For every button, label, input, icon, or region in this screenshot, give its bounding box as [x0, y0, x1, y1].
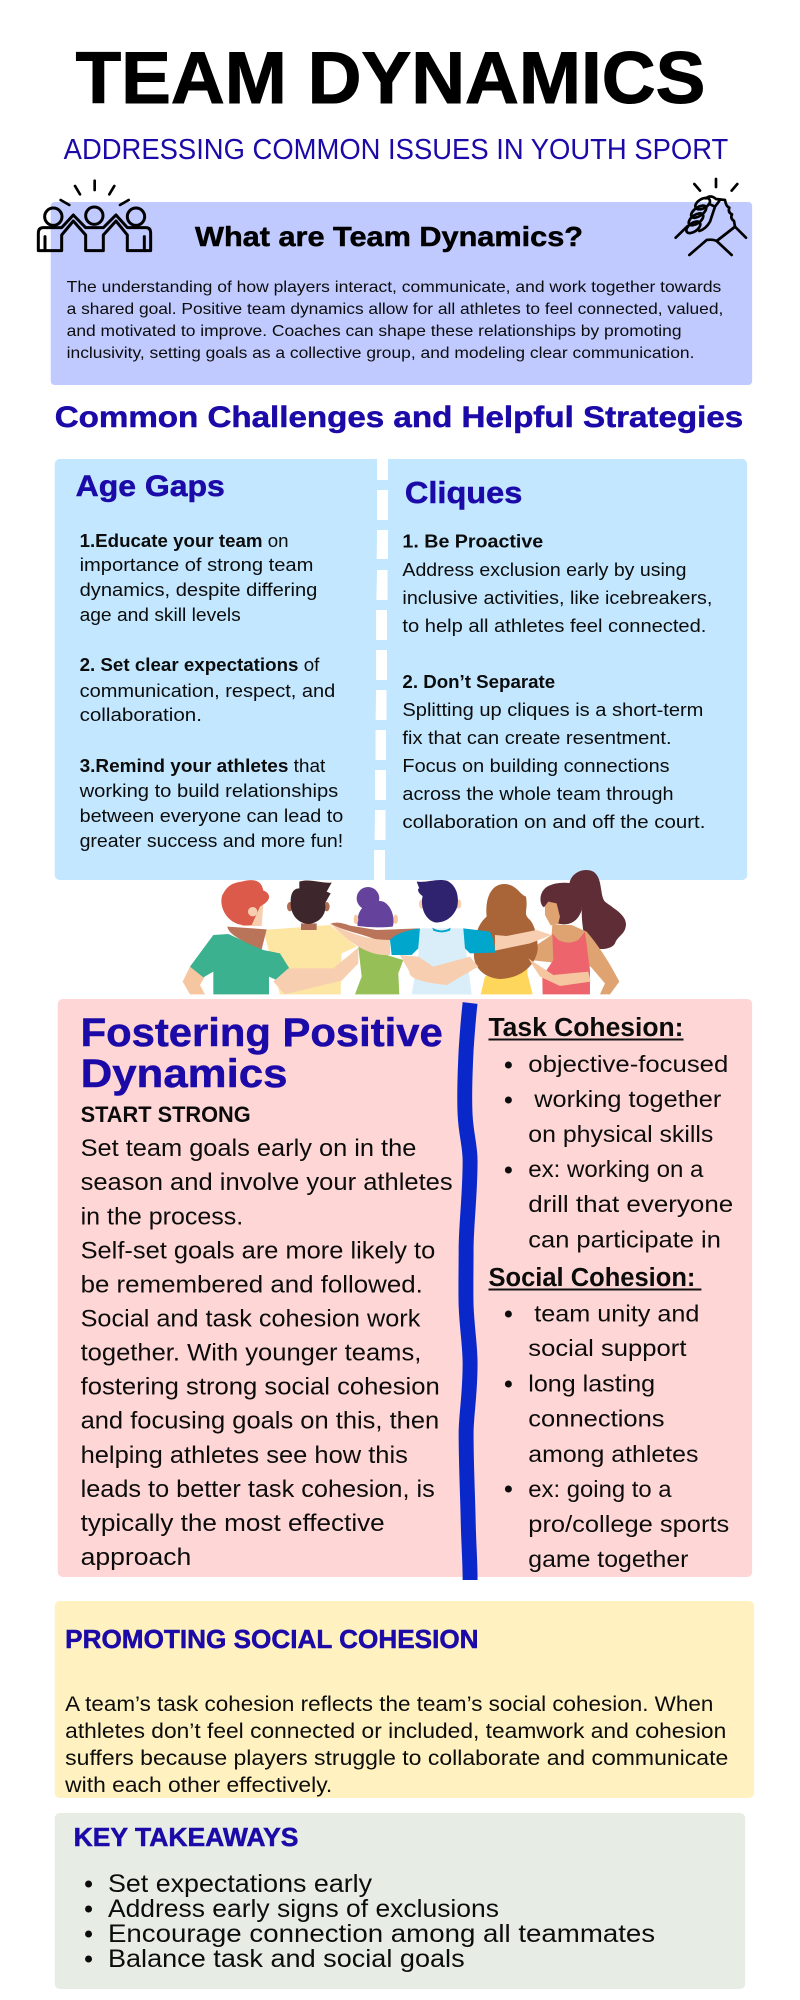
ponytail	[569, 870, 626, 949]
fostering text: together. With younger teams,	[81, 1339, 421, 1367]
social cohesion list: social support	[528, 1335, 687, 1361]
man with dark hair	[263, 881, 357, 994]
panel text: inclusivity, setting goals as a collective group, and modeling clear communication.	[67, 345, 694, 362]
cliques list: 2. Don’t Separate	[402, 671, 555, 692]
wavy divider	[465, 1003, 470, 1580]
promoting text: with each other effectively.	[64, 1774, 332, 1797]
promoting text: A team’s task cohesion reflects the team’s social cohesion. When	[65, 1693, 713, 1716]
social cohesion list	[505, 1300, 729, 1572]
panel text: a shared goal. Positive team dynamics allow for all athletes to feel connected, valued,	[67, 301, 723, 318]
key takeaways heading: KEY TAKEAWAYS	[74, 1824, 298, 1852]
fostering text: Self-set goals are more likely to	[81, 1237, 435, 1265]
task cohesion list: objective-focused	[528, 1051, 728, 1077]
age gaps list: between everyone can lead to	[80, 805, 343, 826]
fostering text: in the process.	[81, 1203, 243, 1231]
age gaps list: communication, respect, and	[80, 680, 335, 701]
social cohesion list: pro/college sports	[528, 1511, 729, 1537]
social cohesion list: connections	[528, 1405, 665, 1432]
panel text: and motivated to improve. Coaches can shape these relationships by promoting	[67, 323, 682, 340]
age gaps list: 2. Set clear expectations of	[80, 654, 320, 675]
icon: team with raised hands	[38, 181, 151, 251]
fostering text: Social and task cohesion work	[81, 1305, 420, 1333]
task cohesion list	[505, 1051, 733, 1253]
panel text: The understanding of how players interact, communicate, and work together towards	[67, 279, 721, 296]
fostering text: be remembered and followed.	[81, 1271, 423, 1299]
panel: fostering positive dynamics	[58, 999, 752, 1580]
teal sleeves	[390, 928, 495, 955]
promoting text: athletes don’t feel connected or included, teamwork and cohesion	[65, 1720, 726, 1743]
cliques list: Splitting up cliques is a short-term	[402, 699, 703, 720]
panel: challenges	[55, 459, 747, 880]
fostering heading	[81, 1011, 443, 1096]
key takeaways list: Address early signs of exclusions	[108, 1895, 499, 1923]
subtitle: ADDRESSING COMMON ISSUES IN YOUTH SPORT	[64, 134, 728, 166]
social cohesion list: game together	[528, 1546, 689, 1572]
cliques list: 1. Be Proactive	[402, 530, 543, 552]
key takeaways list: Set expectations early	[108, 1870, 373, 1898]
cliques list: Address exclusion early by using	[402, 559, 686, 580]
panel: what are team dynamics	[51, 202, 752, 385]
fostering text: fostering strong social cohesion	[81, 1373, 440, 1401]
card: age gaps	[76, 470, 343, 851]
task cohesion list: working together	[533, 1086, 722, 1112]
key takeaways list: Balance task and social goals	[108, 1945, 465, 1973]
woman with ponytail	[530, 883, 619, 994]
woman with long brown hair	[481, 957, 533, 994]
man with navy hair	[412, 880, 472, 994]
cliques list: to help all athletes feel connected.	[402, 615, 706, 636]
cliques list: fix that can create resentment.	[402, 727, 672, 748]
age gaps list	[78, 530, 343, 851]
fostering text	[81, 1135, 453, 1571]
woman with purple bun	[354, 887, 403, 994]
social cohesion list: ex: going to a	[528, 1476, 673, 1502]
task cohesion list: can participate in	[528, 1226, 721, 1253]
cliques list: Focus on building connections	[402, 755, 670, 776]
panel: promoting social cohesion	[55, 1601, 754, 1798]
promoting heading: PROMOTING SOCIAL COHESION	[65, 1626, 479, 1654]
embracing arms	[273, 930, 591, 994]
task cohesion list: on physical skills	[528, 1121, 713, 1147]
fostering text: season and involve your athletes	[81, 1169, 453, 1196]
fostering text: and focusing goals on this, then	[81, 1407, 439, 1435]
key takeaways list: Encourage connection among all teammates	[108, 1920, 655, 1948]
cliques list: across the whole team through	[402, 783, 674, 804]
start strong subheading: START STRONG	[81, 1102, 251, 1127]
social cohesion heading: Social Cohesion:	[488, 1264, 695, 1292]
age gaps list: 1.Educate your team on	[80, 530, 289, 551]
fostering text: leads to better task cohesion, is	[81, 1476, 435, 1503]
age gaps list: dynamics, despite differing	[80, 579, 317, 600]
fostering heading: Fostering Positive	[81, 1011, 443, 1055]
age gaps list: 3.Remind your athletes that	[80, 755, 325, 776]
age gaps list: collaboration.	[80, 704, 202, 725]
fostering text: approach	[81, 1544, 191, 1571]
cliques list: inclusive activities, like icebreakers,	[402, 587, 712, 608]
fostering text: helping athletes see how this	[81, 1442, 408, 1469]
task cohesion list: drill that everyone	[528, 1191, 733, 1217]
cliques list	[402, 530, 712, 832]
cliques list: collaboration on and off the court.	[402, 811, 705, 832]
fostering text: Set team goals early on in the	[81, 1135, 416, 1162]
panel: key takeaways	[55, 1813, 745, 1989]
fostering heading: Dynamics	[81, 1052, 288, 1096]
social cohesion list: long lasting	[528, 1370, 655, 1397]
age gaps heading: Age Gaps	[76, 470, 225, 503]
section heading: Common Challenges and Helpful Strategies	[55, 401, 743, 434]
panel text	[67, 279, 723, 362]
illustration: group of friends from behind	[183, 870, 626, 994]
cliques heading: Cliques	[405, 475, 522, 510]
social cohesion list: team unity and	[534, 1300, 699, 1327]
social cohesion list: among athletes	[528, 1441, 698, 1467]
promoting text	[64, 1693, 728, 1797]
age gaps list: age and skill levels	[80, 604, 241, 625]
panel heading: What are Team Dynamics?	[195, 221, 583, 252]
task cohesion list: ex: working on a	[528, 1156, 704, 1182]
man with red hair	[183, 880, 289, 994]
card: cliques	[402, 475, 712, 832]
task cohesion heading: Task Cohesion:	[488, 1014, 683, 1042]
fostering text: typically the most effective	[81, 1510, 385, 1537]
age gaps list: working to build relationships	[78, 780, 338, 801]
arm across shoulders	[330, 923, 418, 955]
age gaps list: greater success and more fun!	[80, 830, 343, 851]
title: TEAM DYNAMICS	[76, 38, 705, 119]
icon: clasped hands	[676, 179, 746, 255]
promoting text: suffers because players struggle to collaborate and communicate	[65, 1747, 728, 1770]
key takeaways list	[85, 1870, 655, 1973]
age gaps list: importance of strong team	[80, 554, 313, 575]
